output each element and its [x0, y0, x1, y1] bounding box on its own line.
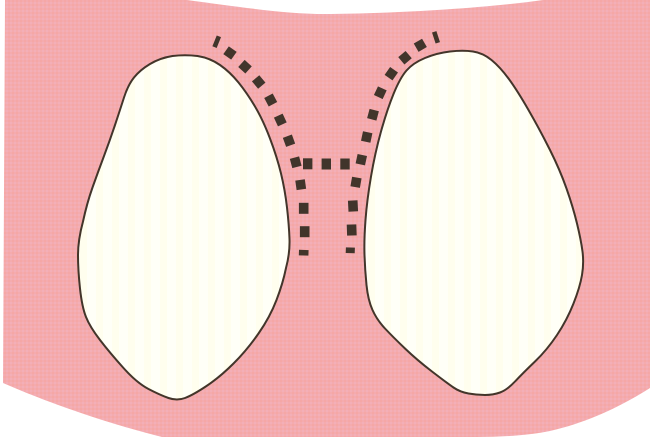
right rounded shape: [364, 51, 583, 395]
dashed line: right curve: [346, 31, 440, 253]
left rounded shape: [78, 55, 290, 400]
dashed line: horizontal bridge: [303, 158, 350, 170]
dashed line: left curve: [212, 35, 310, 256]
